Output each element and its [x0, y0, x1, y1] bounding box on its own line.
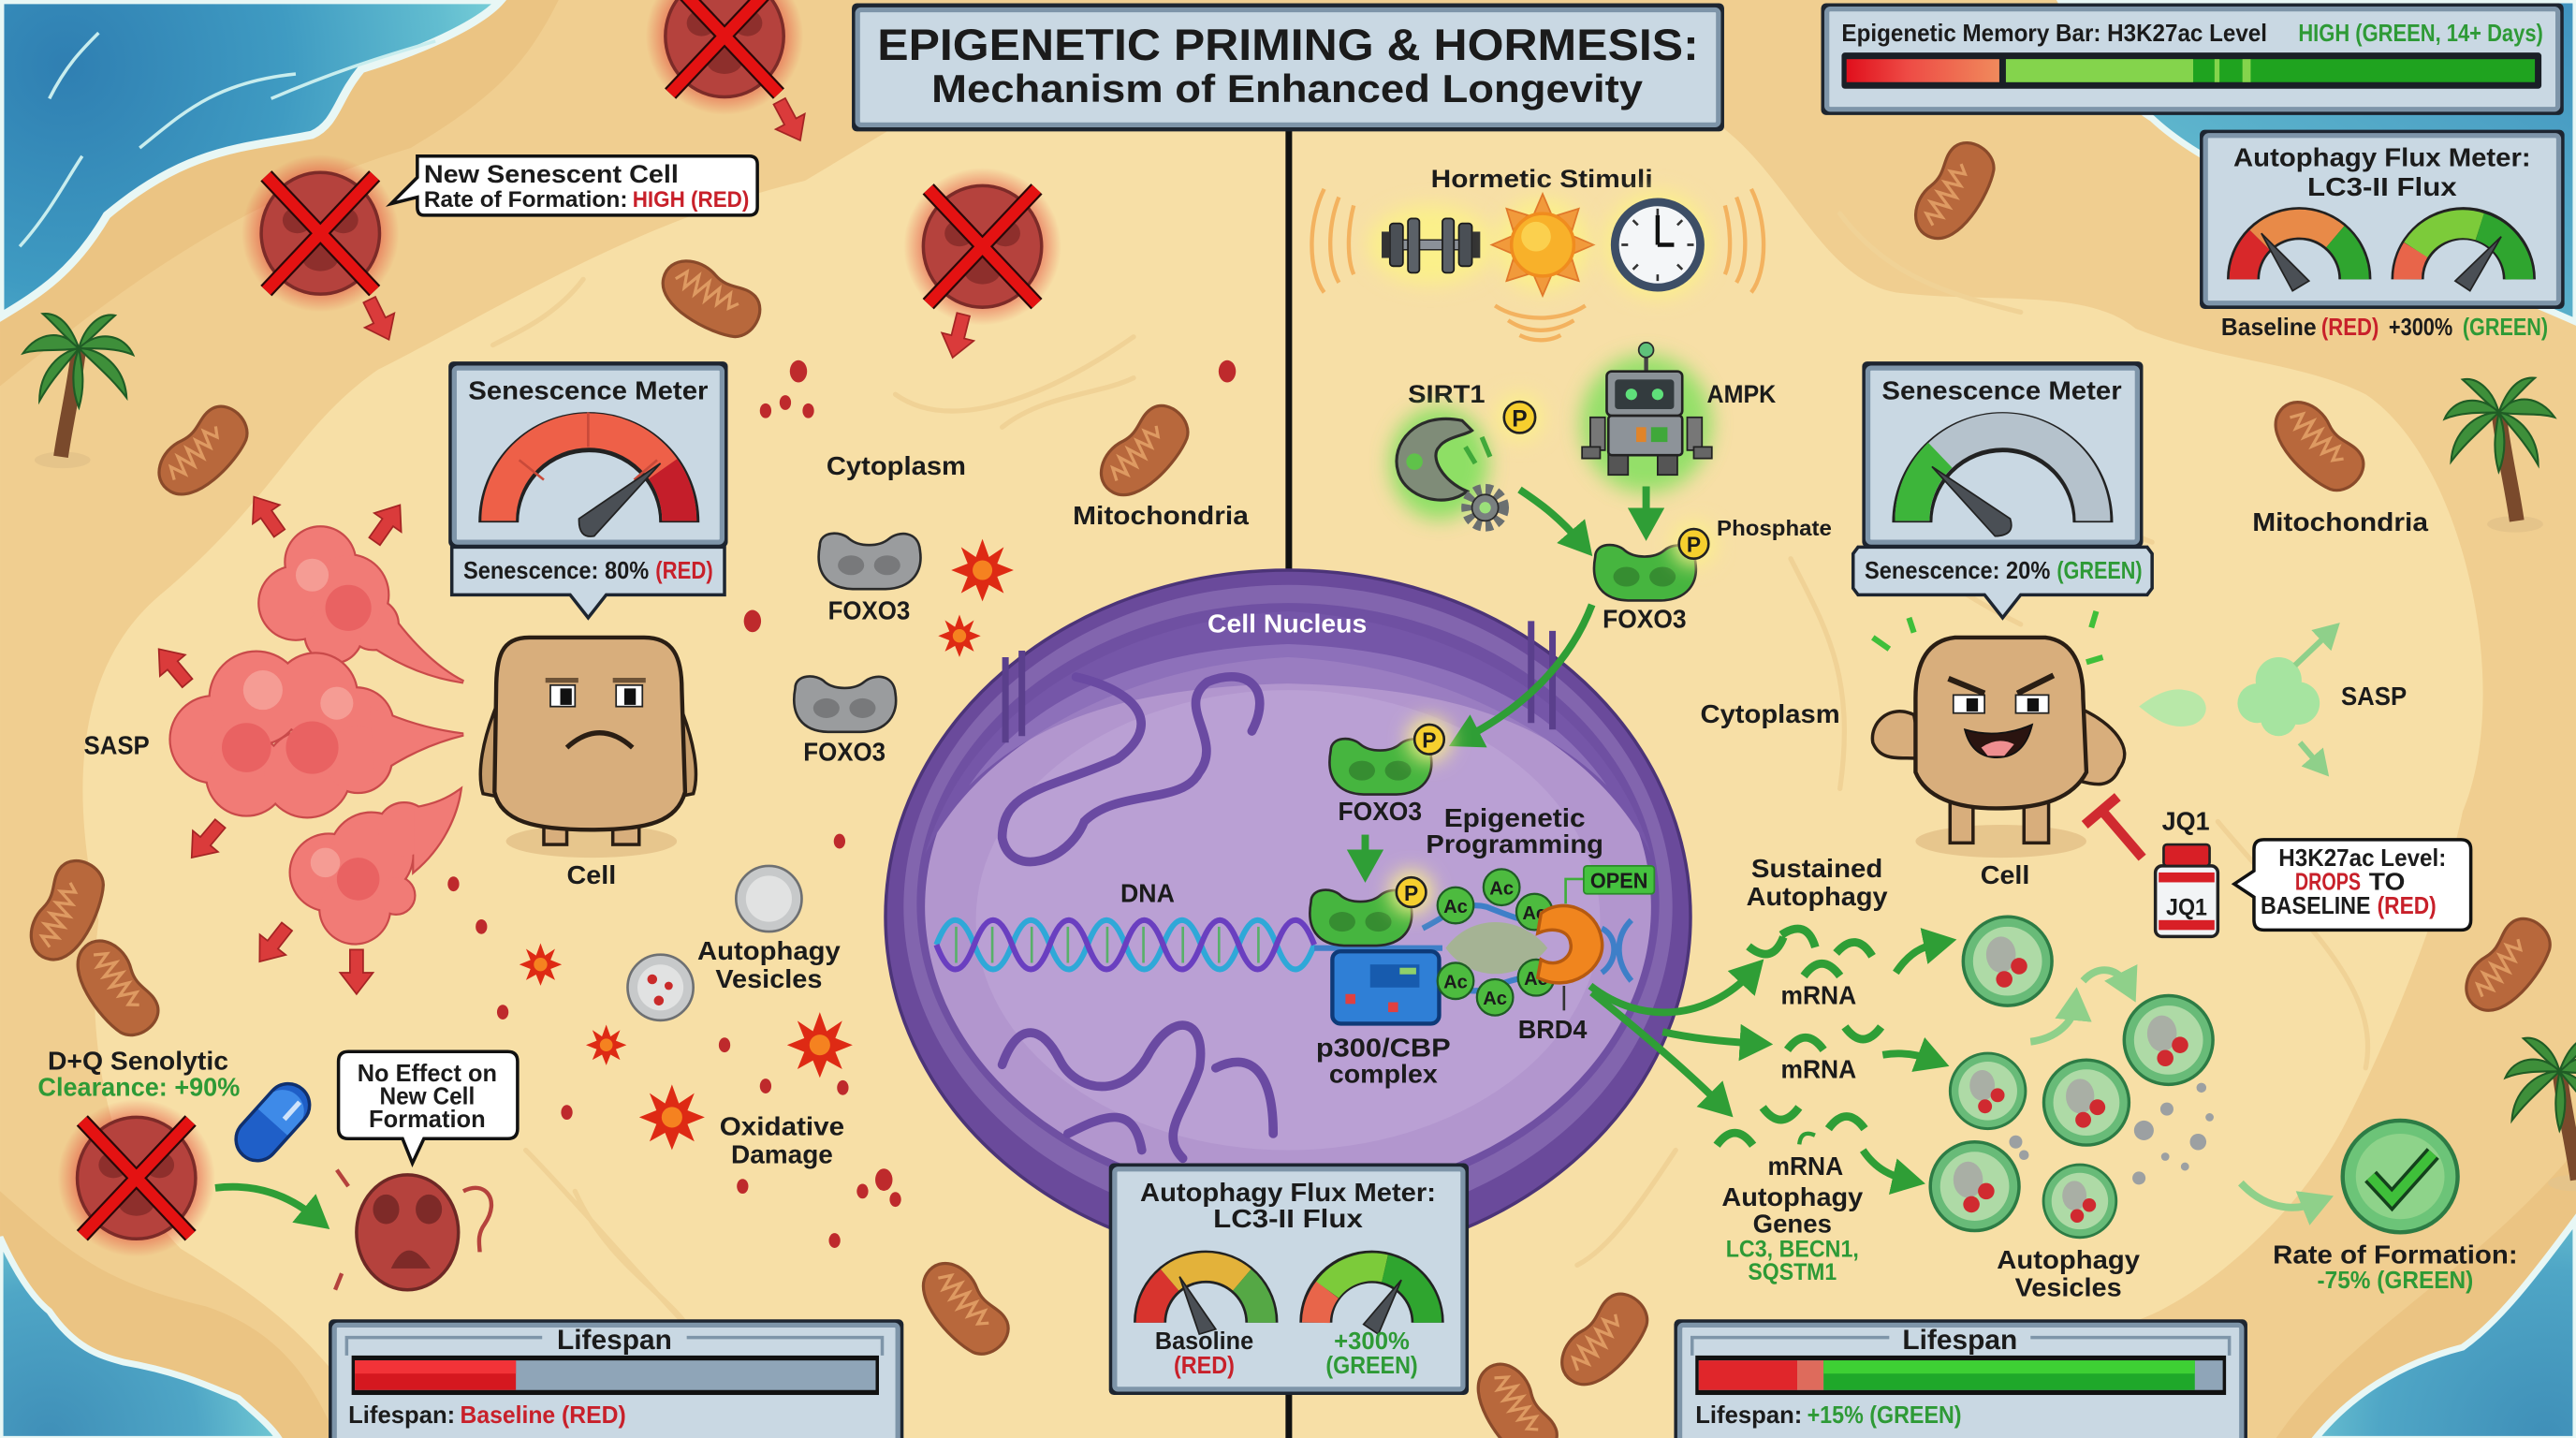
JQ1 vial: JQ1: [2166, 896, 2207, 921]
panel: central autophagy flux meter: [1109, 1164, 1469, 1395]
panel: top-right autophagy flux meter: Autophagy Flux Meter:: [2233, 142, 2531, 171]
arrow red: [247, 917, 300, 972]
sustained autophagy label: Sustained: [1751, 854, 1882, 883]
p300 label: p300/CBP: [1316, 1033, 1451, 1062]
nucleus label: Cell Nucleus: [1208, 609, 1367, 638]
flux meter legend: (RED): [2321, 315, 2378, 341]
D+Q senolytic label: Clearance: +90%: [37, 1073, 240, 1102]
autophagy genes label: SQSTM1: [1748, 1260, 1837, 1285]
gauge +300%: [2408, 224, 2519, 291]
SASP label right: SASP: [2341, 682, 2407, 711]
panel: central autophagy flux meter: (GREEN): [1325, 1351, 1418, 1379]
lifespan bar: [1695, 1356, 2226, 1395]
center divider line: [1285, 128, 1292, 1438]
callout: new senescent cell: HIGH (RED): [633, 188, 749, 213]
water: top-right ocean: [2060, 0, 2576, 322]
arrow: AMPK to FOXO3: [1644, 486, 1648, 522]
callout: new senescent cell: Rate of Formation:: [424, 188, 627, 213]
icon: palm tree right: [2445, 378, 2554, 533]
oxidative damage label: Oxidative: [720, 1112, 844, 1141]
SASP label: SASP: [84, 731, 150, 760]
water: top-left ocean: [0, 0, 501, 317]
p300/CBP machine: [1332, 951, 1439, 1023]
acetyl marks: Ac: [1522, 903, 1546, 924]
gauge: [1912, 431, 2093, 536]
arrow: BRD4 to mRNA upper: [1590, 973, 1751, 1012]
panel: left senescence meter: Senescence Meter: [468, 375, 709, 404]
autophagy genes label: [1721, 1182, 1864, 1285]
gauge baseline: [1150, 1267, 1262, 1334]
chromatin: [1003, 677, 1273, 1158]
gauge baseline: [2244, 224, 2355, 291]
arrow red: [355, 292, 403, 346]
FOXO3 label: FOXO3: [1339, 797, 1422, 826]
arrow: BRD4 to mRNA lower: [1592, 992, 1720, 1104]
pale green arrows: [2295, 633, 2330, 666]
panel: top-right autophagy flux meter: [2200, 130, 2565, 309]
callout: no effect: Formation: [369, 1107, 486, 1133]
panel: lifespan left: Lifespan:: [348, 1402, 455, 1429]
mitochondrion: [20, 853, 116, 970]
cell label: Cell: [567, 860, 616, 889]
mitochondrion: [2453, 910, 2563, 1023]
FOXO3 phosphorylated cytoplasm: [1594, 522, 1715, 600]
mitochondrion: [1549, 1285, 1661, 1398]
epigenetic programming label: Programming: [1426, 829, 1603, 858]
senescent cell with X left: [242, 154, 400, 312]
mRNA strands upper: [1749, 923, 1873, 976]
title line 2: Mechanism of Enhanced Longevity: [931, 66, 1644, 110]
icon: palm tree left: [23, 314, 133, 468]
autophagy vesicles label: Vesicles: [715, 964, 822, 993]
mitochondrion: [1089, 397, 1201, 508]
mitochondria label: Mitochondria: [1073, 501, 1249, 530]
arrow red: [340, 949, 373, 994]
FOXO3 in nucleus: [1329, 718, 1451, 795]
autophagy vesicles label: [697, 936, 841, 993]
icon: sun: [1492, 194, 1593, 296]
cytoplasm label: Cytoplasm: [827, 451, 966, 480]
panel: top-right autophagy flux meter: LC3-II Flux: [2307, 172, 2457, 201]
panel: central autophagy flux meter: +300%: [1334, 1327, 1410, 1355]
callout: no effect: New Cell: [379, 1083, 475, 1109]
label: SIRT1: [1408, 379, 1486, 408]
callout: no effect: [339, 1051, 518, 1164]
water: bottom-left ocean: [0, 1238, 279, 1438]
crescent: [1397, 418, 1472, 500]
callout: H3K27ac level: (RED): [2378, 893, 2437, 919]
sustained autophagy label: Autophagy: [1747, 882, 1888, 911]
mRNA label: mRNA: [1767, 1152, 1843, 1181]
oxidative damage label: [720, 1112, 844, 1169]
flux meter legend: Baseline: [2221, 315, 2317, 341]
arrow: FOXO3 down: [1363, 835, 1368, 864]
gray autophagy vesicle empty: [736, 866, 802, 932]
BRD4 label: BRD4: [1518, 1015, 1588, 1044]
arrow red: [179, 813, 233, 868]
arrow red: [937, 311, 979, 361]
cytoplasm label right: Cytoplasm: [1701, 699, 1840, 728]
AMPK robot: [1580, 343, 1712, 493]
mitochondrion: [651, 249, 768, 350]
panel: lifespan right: +15% (GREEN): [1808, 1402, 1962, 1429]
panel: lifespan left: Baseline (RED): [460, 1402, 626, 1429]
panel: lifespan right: Lifespan:: [1695, 1402, 1802, 1429]
arrow red: [361, 495, 414, 550]
OPEN tag: [1566, 866, 1654, 903]
panel: lifespan right: Lifespan: [1902, 1325, 2017, 1356]
callout: senescence 20%: Senescence: 20%: [1865, 558, 2050, 584]
icon: clock: [1605, 192, 1710, 298]
mitochondrion: [1466, 1354, 1565, 1438]
autophagy vesicles label: Autophagy: [1997, 1245, 2140, 1274]
JQ1 vial: [2156, 844, 2217, 936]
acetyl marks: Ac: [1443, 897, 1468, 917]
arrow: mRNA to vesicle: [1895, 943, 1939, 973]
debris particles: [2009, 1083, 2214, 1184]
flux meter legend: (GREEN): [2463, 315, 2548, 341]
autophagy genes label: Genes: [1753, 1209, 1832, 1238]
icon: dumbbell: [1368, 205, 1493, 285]
BRD4 reader: [1538, 905, 1603, 983]
title banner: [852, 4, 1724, 131]
panel: central autophagy flux meter: Basoline: [1155, 1327, 1253, 1355]
phosphate badge: P: [1422, 728, 1437, 753]
icon: blue pill: [227, 1075, 318, 1169]
DNA label: DNA: [1120, 879, 1175, 908]
phosphate badge: P: [1512, 406, 1528, 432]
phosphate badge: P: [1404, 881, 1418, 905]
callout: new senescent cell: [391, 156, 757, 215]
DNA helix: [936, 920, 1314, 969]
rate of formation label: [2273, 1240, 2518, 1294]
D+Q senolytic label: [37, 1047, 240, 1102]
cell label right: Cell: [1981, 860, 2029, 889]
acetyl marks: Ac: [1443, 973, 1468, 993]
panel: epigenetic memory bar: Epigenetic Memory Bar: H3K27ac Level: [1841, 21, 2267, 47]
callout: senescence 20%: (GREEN): [2056, 558, 2143, 584]
lifespan bar: [352, 1356, 879, 1395]
mRNA strands lower: [1717, 1108, 1865, 1145]
p300 label: [1316, 1033, 1451, 1089]
panel: epigenetic memory bar: HIGH (GREEN, 14+ Days): [2298, 21, 2543, 47]
SASP cloud middle: [171, 653, 463, 816]
gear: [1467, 490, 1503, 526]
arrow red: [241, 488, 293, 543]
autophagy genes label: LC3, BECN1,: [1726, 1238, 1859, 1263]
FOXO3 bound: [1310, 890, 1412, 946]
autophagy vesicles label: [1997, 1245, 2140, 1302]
acetyl marks: Ac: [1524, 969, 1548, 990]
SASP green clouds: [2139, 633, 2330, 766]
mitochondrion: [147, 398, 260, 507]
AMPK label: AMPK: [1707, 379, 1777, 408]
acetyl marks: [1438, 869, 1554, 1016]
autophagy vesicles label: Autophagy: [697, 936, 841, 965]
title line 1: EPIGENETIC PRIMING & HORMESIS:: [877, 21, 1699, 70]
callout: senescence 80%: Senescence: 80%: [463, 558, 649, 584]
panel: central autophagy flux meter: (RED): [1174, 1351, 1235, 1379]
callout: H3K27ac level: TO: [2369, 869, 2405, 895]
mRNA label: mRNA: [1781, 980, 1856, 1009]
gauge: [499, 413, 680, 536]
panel: central autophagy flux meter: LC3-II Flux: [1213, 1204, 1363, 1233]
JQ1 label: JQ1: [2162, 806, 2210, 835]
callout: H3K27ac level: DROPS: [2295, 869, 2361, 895]
SIRT1 enzyme: [1390, 379, 1543, 526]
arrow red: [765, 94, 814, 148]
mRNA strands middle: [1788, 1027, 1881, 1049]
FOXO3 label: FOXO3: [803, 738, 886, 767]
D+Q senolytic label: D+Q Senolytic: [48, 1047, 228, 1076]
oxidative damage label: Damage: [731, 1140, 833, 1169]
senescent cell with X right: [903, 168, 1061, 325]
callout: H3K27ac level: H3K27ac Level:: [2278, 845, 2446, 872]
arrow: FOXO3 into nucleus: [1466, 605, 1592, 738]
autophagy genes label: Autophagy: [1721, 1182, 1864, 1211]
inactive FOXO3: [819, 534, 920, 589]
OPEN tag: OPEN: [1590, 869, 1647, 893]
phosphate badge: P: [1687, 533, 1701, 557]
DNA bubble: [1445, 922, 1547, 974]
gauge +300%: [1316, 1267, 1427, 1334]
icon: green check cell: [2343, 1121, 2458, 1232]
mitochondrion: [1903, 134, 2007, 250]
callout: no effect: No Effect on: [358, 1061, 497, 1087]
mitochondrion: [2262, 389, 2372, 504]
mitochondrion: [910, 1252, 1017, 1367]
gray autophagy vesicle with cargo: [627, 955, 694, 1020]
arrow: mRNA to vesicle: [1882, 1053, 1932, 1060]
icon: palm tree bottom right: [2505, 1036, 2576, 1191]
cell nucleus: [886, 570, 1690, 1264]
hormetic stimuli: [1311, 164, 1764, 340]
rate of formation label: Rate of Formation:: [2273, 1240, 2518, 1269]
arrow: mRNA to vesicle: [1863, 1151, 1908, 1180]
FOXO3 label: FOXO3: [828, 596, 910, 625]
epigenetic programming label: [1426, 803, 1603, 858]
panel: right senescence meter: Senescence Meter: [1881, 375, 2122, 404]
panel: right senescence meter: [1862, 361, 2143, 547]
arrow: to formation check: [2241, 1183, 2317, 1208]
senescent cell with X top: [646, 0, 803, 115]
phosphate badge: [1497, 394, 1543, 440]
mitochondrion: [65, 930, 166, 1047]
water: bottom-right ocean: [2315, 1219, 2576, 1438]
mitochondria label right: Mitochondria: [2252, 507, 2428, 536]
p300 label: complex: [1329, 1060, 1438, 1089]
panel: central autophagy flux meter: Autophagy Flux Meter:: [1140, 1178, 1436, 1207]
panel: lifespan left: Lifespan: [557, 1325, 672, 1356]
acetyl marks: Ac: [1489, 879, 1514, 900]
mRNA label: mRNA: [1781, 1054, 1856, 1083]
left senescent cell character: [480, 638, 695, 858]
arrow: clearance to new cell: [215, 1187, 315, 1217]
label: Hormetic Stimuli: [1431, 164, 1653, 193]
rate of formation label: -75% (GREEN): [2318, 1266, 2473, 1294]
autophagy vesicles label: Vesicles: [2015, 1273, 2122, 1302]
phosphate badge: [1390, 871, 1432, 914]
arrow: vesicle recycling: [2083, 970, 2128, 986]
arrow: SIRT1 to FOXO3: [1519, 490, 1580, 542]
FOXO3 label: FOXO3: [1603, 604, 1687, 633]
epigenetic programming label: Epigenetic: [1444, 803, 1586, 832]
flux meter legend: [2221, 315, 2548, 341]
senescent cell cleared: [57, 1099, 215, 1257]
callout: H3K27ac level: [2234, 840, 2471, 930]
callout: senescence 80%: (RED): [655, 558, 713, 584]
panel: lifespan left: [329, 1319, 903, 1438]
arrow red: [146, 638, 200, 694]
memory bar: [1841, 52, 2541, 89]
callout: new senescent cell: New Senescent Cell: [424, 159, 679, 188]
arrow: vesicle recycling: [2030, 1005, 2075, 1042]
panel: left senescence meter: [448, 361, 728, 547]
callout: senescence 20%: [1853, 547, 2152, 618]
phosphate label: Phosphate: [1717, 516, 1832, 540]
inactive FOXO3: [794, 676, 896, 732]
new senescent cell sad: [335, 1170, 491, 1290]
acetyl marks: Ac: [1483, 989, 1507, 1009]
right healthy cell character: [1872, 611, 2125, 858]
inhibition T bar from JQ1: [2085, 797, 2143, 858]
flux meter legend: +300%: [2389, 315, 2452, 341]
panel: lifespan right: [1674, 1319, 2247, 1438]
panel: epigenetic memory bar: [1822, 4, 2564, 115]
oxidative damage particles: [447, 360, 1236, 1248]
SASP cloud top: [259, 527, 463, 682]
autophagy vesicles: [1930, 917, 2213, 1238]
callout: H3K27ac level: BASELINE: [2261, 893, 2371, 919]
SASP cloud bottom: [291, 790, 460, 943]
arrow: BRD4 to mRNA middle: [1662, 1032, 1754, 1043]
sustained autophagy label: [1747, 854, 1888, 911]
open chromatin complex: [1310, 866, 1654, 1023]
callout: senescence 80%: [452, 547, 724, 618]
